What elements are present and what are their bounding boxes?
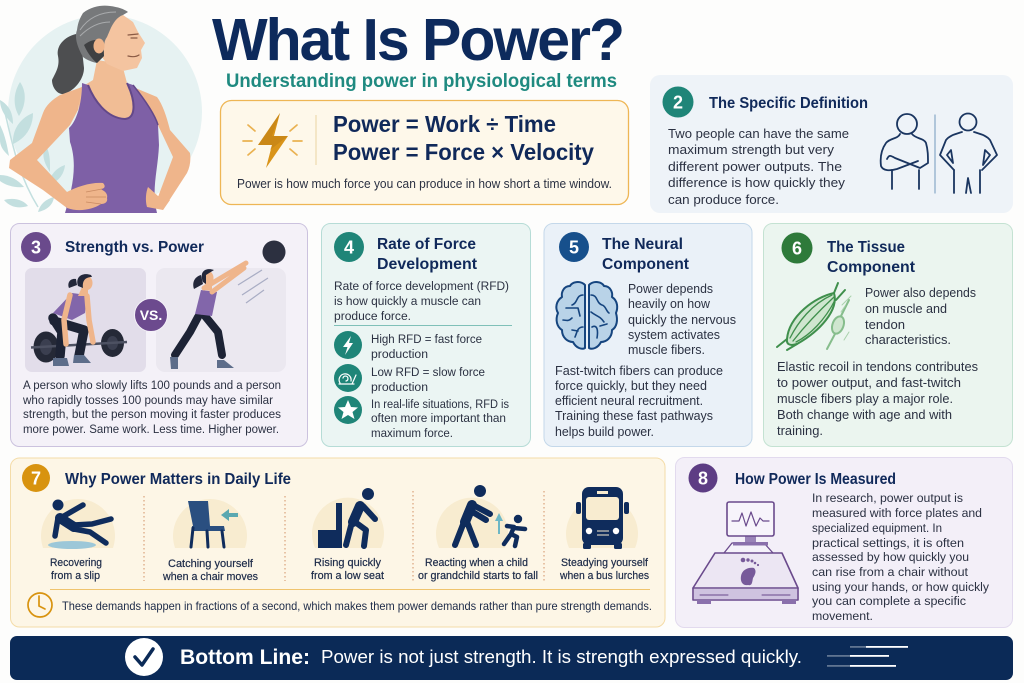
number badge 2 xyxy=(662,86,694,118)
body text xyxy=(334,279,509,323)
ponytail xyxy=(52,34,84,94)
label: catching yourself xyxy=(162,558,258,583)
heading: Component xyxy=(827,259,916,276)
label: steadying yourself: Steadying yourself xyxy=(561,557,649,569)
body text: Two people can have the same xyxy=(668,126,849,141)
panel 2: the specific definition xyxy=(650,75,1013,213)
label: recovering from a slip xyxy=(50,557,102,582)
body text upper: tendon xyxy=(865,317,905,332)
icon: speed lines xyxy=(827,646,908,667)
body text lower: Both change with age and with xyxy=(777,407,952,422)
body text lower: muscle fibers play a major role. xyxy=(777,391,953,406)
heading: Development xyxy=(377,256,478,273)
label: steadying yourself: when a bus lurches xyxy=(559,570,649,582)
body text xyxy=(668,126,849,207)
icon: reacting to a falling child xyxy=(436,485,525,548)
body text: assessed by how quickly you xyxy=(812,550,969,564)
label: reacting when a child xyxy=(418,557,538,582)
illustration: woman with hands on hips xyxy=(0,6,202,213)
body text: practical settings, it is often xyxy=(812,536,964,550)
heading: How Power Is Measured xyxy=(735,471,896,488)
body text lower: Elastic recoil in tendons contributes xyxy=(777,359,978,374)
number badge 2: 2 xyxy=(673,92,683,112)
illustration: deadlift xyxy=(25,268,146,372)
icon: clock xyxy=(28,593,52,617)
heading xyxy=(827,239,916,276)
body text upper: heavily on how xyxy=(628,296,711,311)
label: rising quickly xyxy=(311,557,384,582)
body text lower xyxy=(777,359,978,438)
number badge 5: 5 xyxy=(569,238,579,258)
body text: who rapidly tosses 100 pounds may have similar xyxy=(22,393,273,407)
icon: bus xyxy=(566,487,638,549)
body text: using your hands, or how quickly xyxy=(812,580,990,594)
body text upper: on muscle and xyxy=(865,301,947,316)
icon: check mark xyxy=(125,638,163,676)
body text upper xyxy=(865,285,976,347)
body text upper: quickly the nervous xyxy=(628,312,736,327)
body text: you can complete a specific xyxy=(812,594,966,608)
body text: In research, power output is xyxy=(812,491,963,505)
label: reacting when a child: Reacting when a child xyxy=(425,557,528,569)
icon: bolt xyxy=(334,331,362,359)
body text: produce force. xyxy=(334,309,411,323)
note text: These demands happen in fractions of a second, which makes them power demands rather than pure strength demands. xyxy=(62,599,652,613)
icon: snail xyxy=(334,364,362,392)
icon: star xyxy=(334,396,362,424)
icon: force plate and monitor xyxy=(693,502,798,604)
heading xyxy=(602,236,690,273)
formula caption: Power is how much force you can produce in how short a time window. xyxy=(237,176,612,191)
right arm xyxy=(133,87,190,210)
body text xyxy=(22,378,281,436)
body text upper: muscle fibers. xyxy=(628,342,705,357)
icon: brain xyxy=(556,282,617,349)
number badge 8 xyxy=(688,464,718,492)
panel 8: how power is measured xyxy=(676,458,1012,628)
icon: two people outlines xyxy=(881,114,997,193)
high rfd text: production xyxy=(371,347,428,361)
label: recovering from a slip: from a slip xyxy=(51,570,100,582)
number badge 3 xyxy=(21,232,51,262)
body text: can rise from a chair without xyxy=(812,565,969,579)
body text: different power outputs. The xyxy=(668,159,842,174)
number badge 8: 8 xyxy=(698,468,708,488)
body text lower: training. xyxy=(777,423,823,438)
number badge 7: 7 xyxy=(31,468,41,488)
heading: The Tissue xyxy=(827,239,905,256)
heading: The Specific Definition xyxy=(709,95,868,112)
real life text xyxy=(371,397,509,440)
body text lower: Training these fast pathways xyxy=(555,408,713,423)
low rfd text: Low RFD = slow force xyxy=(371,365,485,379)
body text: maximum strength but very xyxy=(668,142,835,157)
body text upper: system activates xyxy=(628,327,720,342)
number badge 3: 3 xyxy=(31,238,41,258)
label: rising quickly: from a low seat xyxy=(311,570,384,582)
low rfd text xyxy=(371,365,485,394)
hair xyxy=(76,6,128,63)
tank top xyxy=(65,83,159,213)
heading: Strength vs. Power xyxy=(65,239,204,256)
body text: measured with force plates and xyxy=(812,506,982,520)
icon: lightning bolt xyxy=(243,113,302,168)
label: reacting when a child: or grandchild starts to fall xyxy=(418,570,538,582)
body text upper: Power also depends xyxy=(865,285,976,300)
title: What Is Power? xyxy=(212,7,625,73)
head xyxy=(97,15,145,71)
body text lower: Fast-twitch fibers can produce xyxy=(555,363,723,378)
vs badge xyxy=(134,298,168,332)
panel 7: why power matters in daily life xyxy=(10,458,665,627)
body text lower xyxy=(555,363,723,439)
heading xyxy=(377,236,478,273)
body text: strength, but the person moving it faster produces xyxy=(23,407,281,421)
panel 3: strength vs power xyxy=(10,224,308,446)
subtitle: Understanding power in physiological terms xyxy=(226,70,617,92)
heading: Why Power Matters in Daily Life xyxy=(65,471,291,488)
body text: is how quickly a muscle can xyxy=(334,294,481,308)
hands on hips xyxy=(65,183,107,210)
body text: A person who slowly lifts 100 pounds and a person xyxy=(23,378,281,392)
number badge 4 xyxy=(334,232,364,262)
panel: formula xyxy=(220,100,628,204)
neck and chest xyxy=(78,60,140,125)
body text lower: force quickly, but they need xyxy=(555,378,707,393)
panel 4: rate of force development xyxy=(322,224,530,446)
number badge 7 xyxy=(22,464,50,492)
label: catching yourself: Catching yourself xyxy=(168,558,254,570)
left arm xyxy=(9,87,82,208)
body text: movement. xyxy=(812,609,873,623)
label: catching yourself: when a chair moves xyxy=(162,571,258,583)
icon: rising from a low seat xyxy=(312,488,384,548)
body text: difference is how quickly they xyxy=(668,175,846,190)
real life text: In real-life situations, RFD is xyxy=(371,397,509,411)
formula: power equals work over time: Power = Work ÷ Time xyxy=(333,111,556,137)
label: rising quickly: Rising quickly xyxy=(314,557,381,569)
icon: chair moving xyxy=(173,499,247,548)
body text upper: Power depends xyxy=(628,281,713,296)
body text lower: to power output, and fast-twitch xyxy=(777,375,961,390)
high rfd text: High RFD = fast force xyxy=(371,332,482,346)
body text lower: efficient neural recruitment. xyxy=(555,393,703,408)
body text xyxy=(812,491,990,623)
body text lower: helps build power. xyxy=(555,424,654,439)
low rfd text: production xyxy=(371,380,428,394)
heading: Rate of Force xyxy=(377,236,476,253)
heading: The Neural xyxy=(602,236,683,253)
body text: more power. Same work. Less time. Higher power. xyxy=(23,422,279,436)
number badge 6 xyxy=(782,232,812,264)
number badge 5 xyxy=(559,232,589,262)
icon: slipping person xyxy=(41,499,115,549)
illustration: medicine ball throw xyxy=(156,240,286,372)
real life text: maximum force. xyxy=(371,426,453,440)
bottom line label: Bottom Line: xyxy=(180,646,310,669)
label: steadying yourself xyxy=(559,557,649,582)
body text: can produce force. xyxy=(668,192,779,207)
vs badge: VS. xyxy=(140,307,162,323)
heading: Component xyxy=(602,256,690,273)
number badge 4: 4 xyxy=(344,238,354,258)
panel 6: the tissue component xyxy=(764,224,1012,446)
body text upper xyxy=(628,281,736,357)
number badge 6: 6 xyxy=(792,238,802,258)
formula: power equals force times velocity: Power = Force × Velocity xyxy=(333,139,594,165)
real life text: often more important than xyxy=(371,411,506,425)
body text: specialized equipment. In xyxy=(812,521,942,535)
high rfd text xyxy=(371,332,482,361)
banner: bottom line xyxy=(10,636,1013,680)
body text upper: characteristics. xyxy=(865,332,951,347)
panel 5: the neural component xyxy=(544,224,752,446)
bottom line statement: Power is not just strength. It is strength expressed quickly. xyxy=(321,646,802,667)
label: recovering from a slip: Recovering xyxy=(50,557,102,569)
body text: Rate of force development (RFD) xyxy=(334,279,509,293)
icon: muscle and tendon xyxy=(777,283,851,350)
